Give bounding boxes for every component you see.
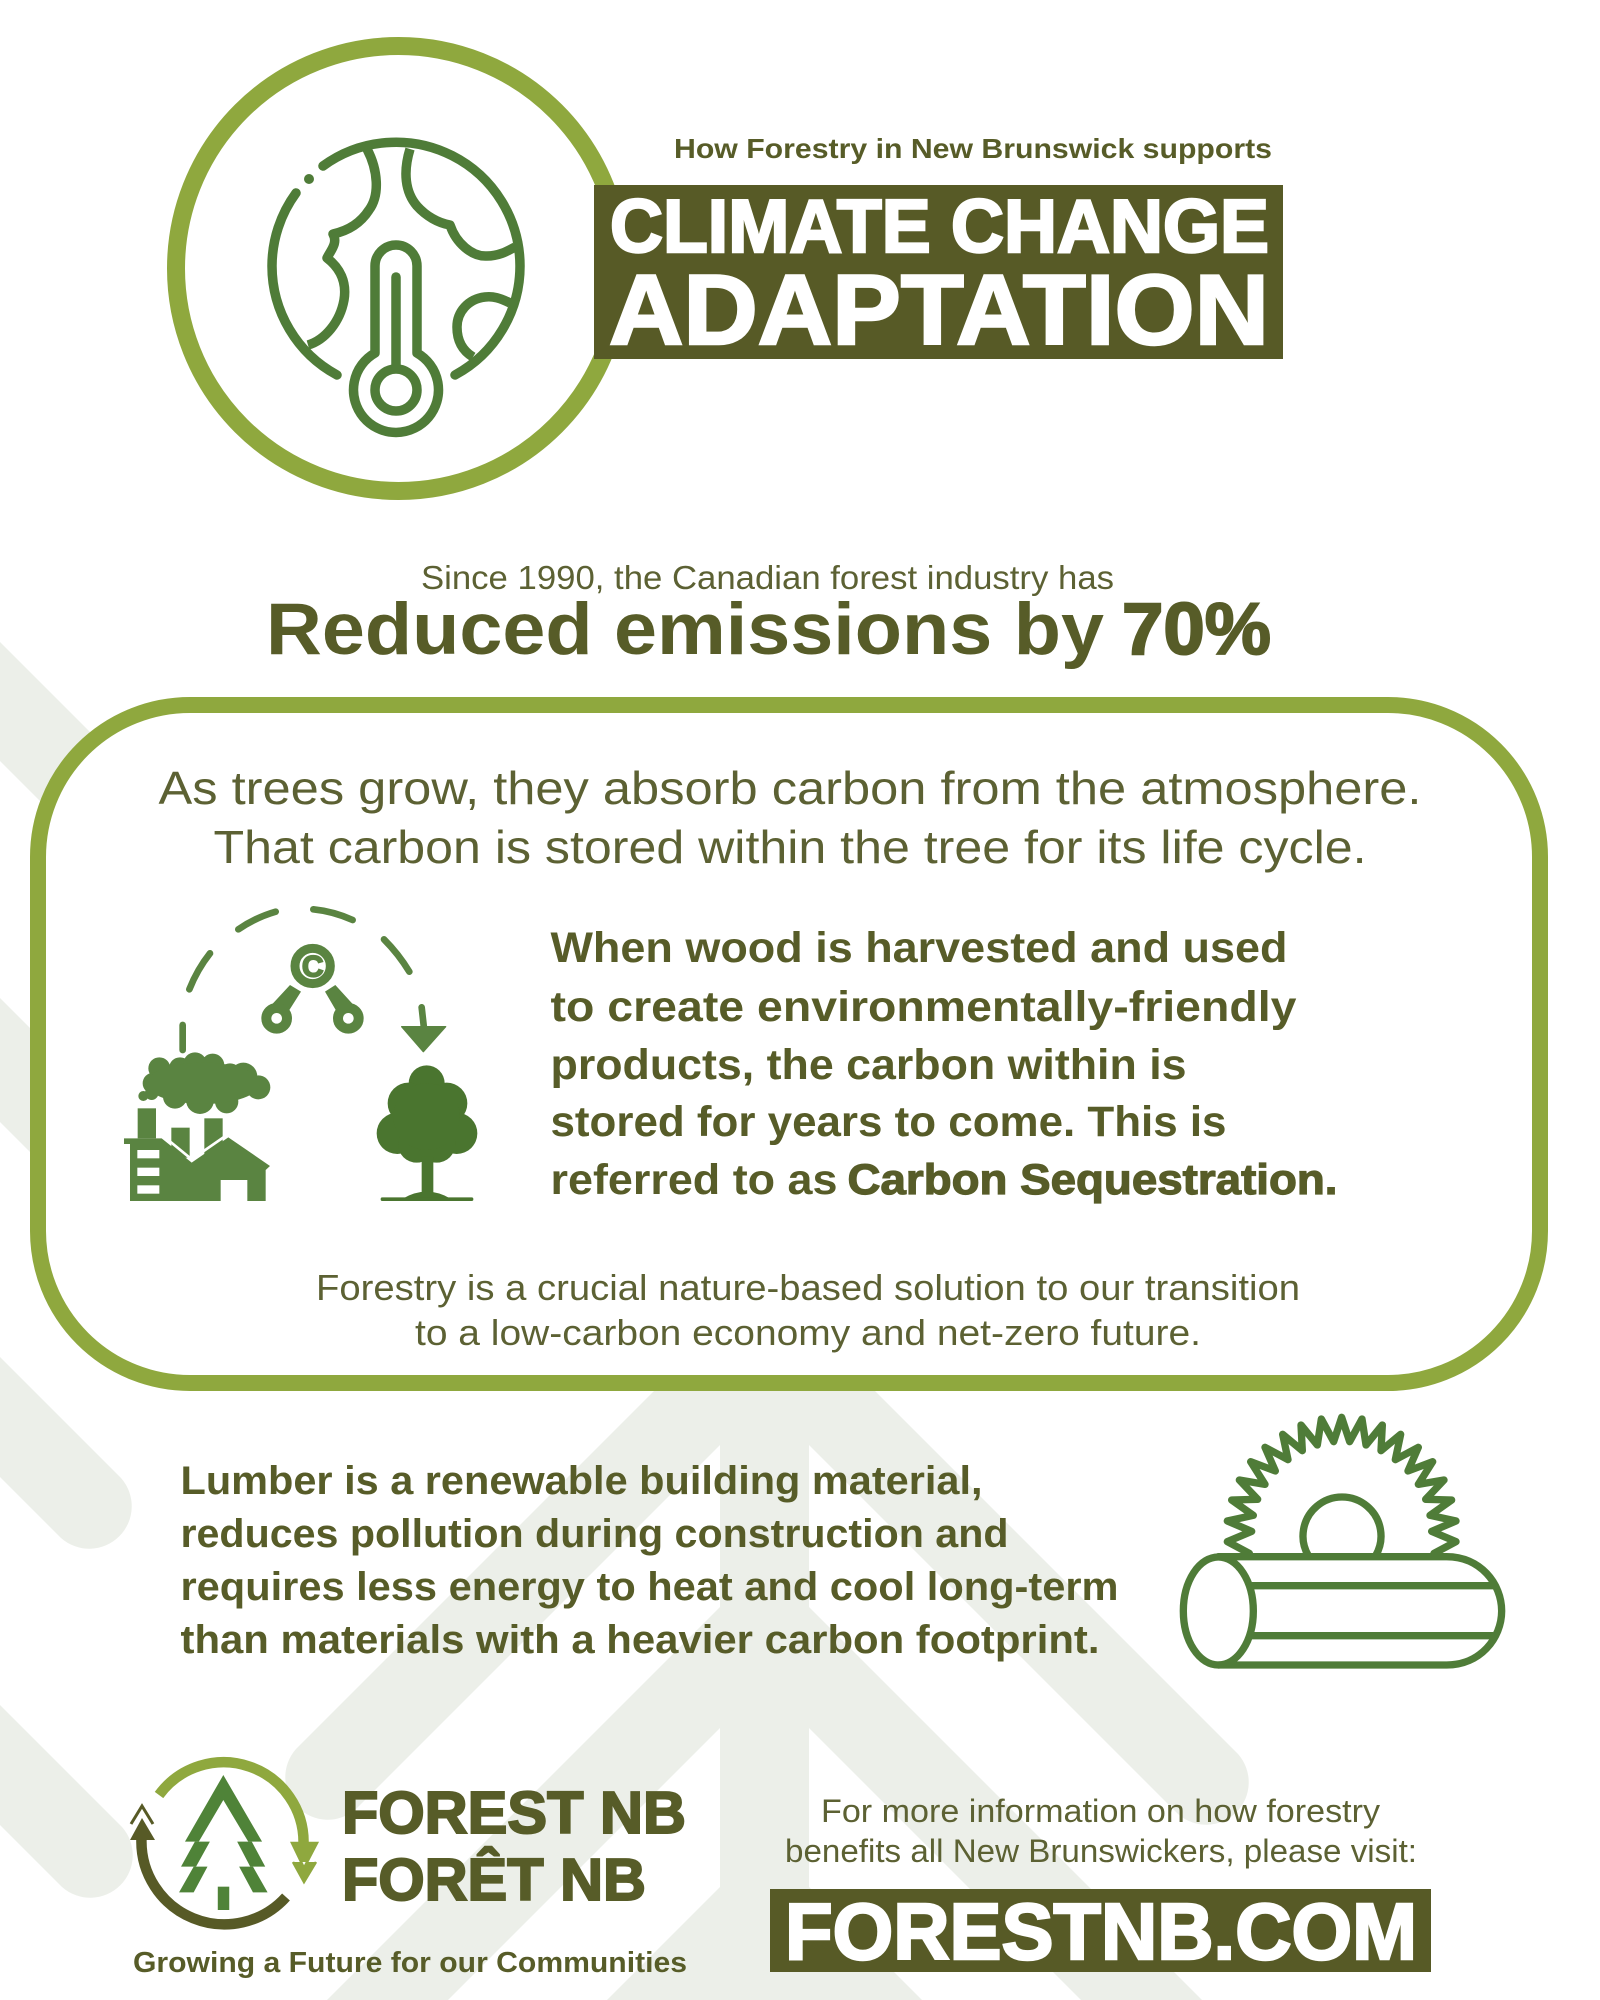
text: lumber benefits: Lumber is a renewable building material, [180,1459,982,1503]
icon: factory [124,1108,270,1201]
logo: wordmark: FOREST NB [342,1780,686,1846]
logo: lower arc [141,1838,286,1924]
title line 1: CLIMATE CHANGE [610,184,1269,268]
icon: carbon molecule [266,948,359,1029]
text: lumber benefits [180,1459,1118,1662]
text: carbon sequestration explanation: to create environmentally-friendly [550,983,1297,1031]
panel intro text: As trees grow, they absorb carbon from the atmosphere. [158,762,1422,814]
logo: upper arc [159,1762,304,1845]
icon: smoke cloud [138,1052,270,1114]
panel intro text: That carbon is stored within the tree for its life cycle. [214,821,1366,873]
logo: tree [179,1775,268,1910]
logo: chevron [131,1806,153,1824]
text: lumber benefits: requires less energy to heat and cool long-term [180,1565,1118,1609]
header: kicker line: How Forestry in New Brunswick supports [674,133,1272,164]
headline statistic: Reduced emissions by [266,589,1104,670]
icon: carbon cycle from factory to tree [124,909,477,1201]
70% figure: 70% [1122,589,1271,670]
logo: upper arrowhead [292,1843,317,1882]
icon: globe with thermometer [272,142,520,432]
text: nature-based solution [316,1267,1300,1353]
text: carbon sequestration explanation: stored for years to come. This is [550,1098,1226,1146]
icon: carbon molecule: C [302,951,323,984]
icon: arrowhead [402,1027,446,1052]
text: nature-based solution: to a low-carbon economy and net-zero future. [415,1312,1201,1353]
logo: tagline: Growing a Future for our Communities [133,1947,687,1979]
icon: dashed arc [183,909,424,1050]
text: carbon sequestration explanation [550,924,1338,1204]
title banner [594,184,1283,365]
text: more information [785,1793,1417,1869]
logo: lower arrowhead [130,1818,155,1840]
text: more information: benefits all New Brunswickers, please visit: [785,1833,1417,1869]
logo: wordmark: FORÊT NB [342,1846,646,1913]
icon: saw blade and log [1183,1417,1502,1665]
logo: wordmark [342,1780,686,1913]
text: nature-based solution: Forestry is a crucial nature-based solution to our transition [316,1267,1300,1308]
text: carbon sequestration explanation: products, the carbon within is [550,1041,1186,1089]
text: lumber benefits: reduces pollution during construction and [180,1512,1008,1556]
website banner: FORESTNB.COM [785,1887,1417,1976]
text: lumber benefits: than materials with a heavier carbon footprint. [180,1618,1100,1662]
panel: carbon storage [38,705,1540,1383]
text: carbon sequestration explanation: Carbon Sequestration. [848,1156,1338,1204]
icon: tree [377,1065,477,1201]
logo: Forest NB [130,1762,687,1979]
icon: large green ring [176,46,621,491]
background: faint tree chevron pattern [0,642,1249,2000]
intro line: Since 1990, the Canadian forest industry has [421,559,1114,596]
text: more information: For more information on how forestry [821,1793,1380,1829]
title line 2: ADAPTATION [609,254,1269,365]
text: carbon sequestration explanation: referred to as [550,1156,838,1204]
panel intro text [158,762,1422,873]
text: carbon sequestration explanation: When wood is harvested and used [550,924,1288,972]
